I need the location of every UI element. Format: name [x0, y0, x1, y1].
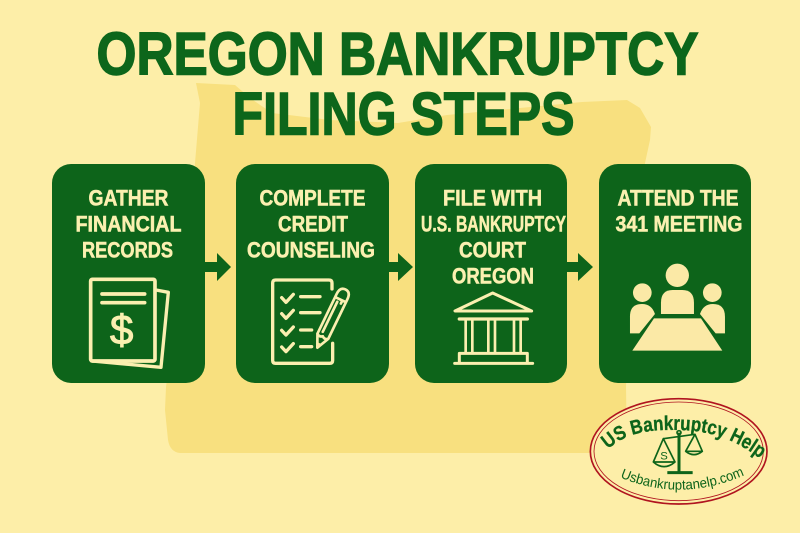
- seal website text: Usbankruptanelp.com: [622, 468, 744, 492]
- heading: step 1: [76, 186, 182, 262]
- title: OREGON BANKRUPTCY: [96, 20, 698, 88]
- heading: step 1: GATHER: [88, 186, 168, 210]
- icon: financial document with dollar sign: $: [110, 306, 133, 353]
- heading: step 2: [247, 186, 375, 262]
- title: FILING STEPS: [232, 80, 574, 148]
- seal name text: US Bankruptcy Help: [600, 415, 764, 458]
- icon: checklist with pencil: [273, 280, 351, 363]
- heading: step 1: RECORDS: [82, 238, 173, 262]
- heading: step 3: COURT: [459, 238, 526, 262]
- panel: file with U.S. Bankruptcy Court Oregon: [415, 164, 567, 383]
- icon: people around meeting table: [630, 264, 725, 351]
- heading: step 4: ATTEND THE: [618, 186, 738, 210]
- Oregon state silhouette: [165, 83, 651, 453]
- heading: step 2: CREDIT: [278, 212, 348, 236]
- icon: courthouse: [455, 293, 533, 363]
- panel: attend the 341 meeting: [599, 164, 751, 383]
- icon: balance scale: S: [660, 450, 668, 462]
- heading: step 3: [421, 186, 566, 288]
- heading: step 2: COMPLETE: [260, 186, 366, 210]
- logo seal: US Bankruptcy Help: [590, 398, 768, 505]
- panel: gather financial records: [52, 164, 205, 383]
- heading: step 1: FINANCIAL: [76, 212, 182, 236]
- heading: step 4: [616, 186, 742, 236]
- arrow: step 1 to 2: [205, 253, 231, 281]
- arrow: step 3 to 4: [567, 253, 593, 281]
- icon: balance scale: [653, 431, 702, 473]
- arrow: step 2 to 3: [389, 253, 413, 281]
- heading: step 3: FILE WITH: [443, 186, 542, 210]
- heading: step 3: U.S. BANKRUPTCY: [421, 212, 566, 236]
- heading: step 4: 341 MEETING: [616, 212, 742, 236]
- heading: step 2: COUNSELING: [247, 238, 375, 262]
- panel: complete credit counseling: [236, 164, 389, 383]
- heading: step 3: OREGON: [452, 264, 534, 288]
- title: [96, 20, 698, 148]
- icon: financial document with dollar sign: [91, 279, 168, 367]
